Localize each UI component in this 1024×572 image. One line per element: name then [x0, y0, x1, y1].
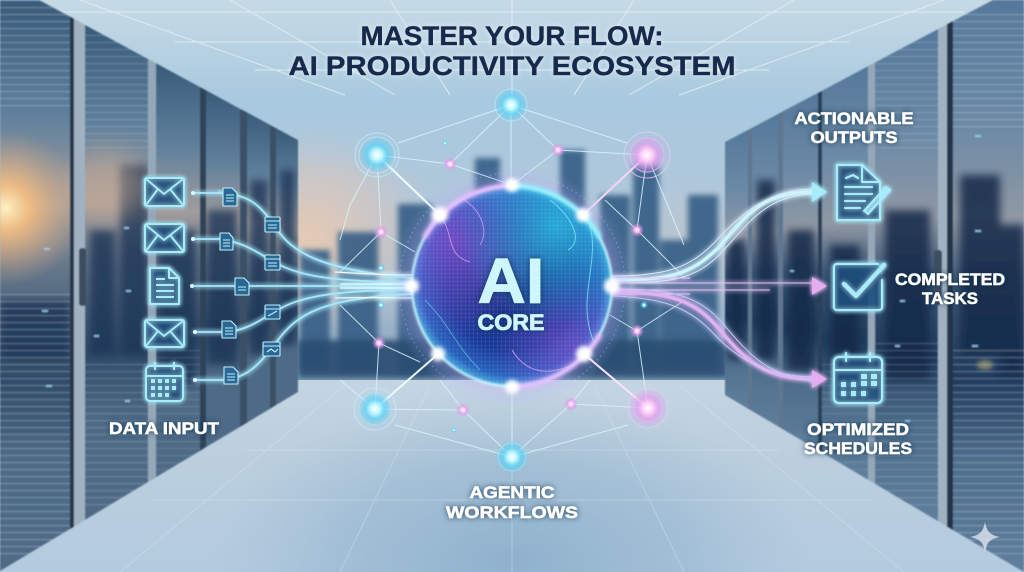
packet: doc 4 [222, 321, 236, 338]
agentic workflow network [340, 88, 684, 474]
icon: calendar [146, 362, 183, 401]
icon: email 1 [145, 178, 184, 206]
label: actionable outputs: ACTIONABLE [794, 110, 914, 128]
ceiling [60, 0, 964, 95]
small data packets on flow lines [220, 188, 280, 384]
label: agentic workflows [446, 483, 578, 522]
label: data input: DATA INPUT [109, 420, 219, 438]
packet: doc 3 [235, 278, 249, 295]
label: actionable outputs [794, 110, 914, 147]
output icons [834, 165, 890, 403]
arrow: to completed tasks [612, 278, 812, 294]
packet: calendar 2 [265, 255, 280, 270]
packet: doc 1 [223, 188, 237, 206]
server racks: right [725, 0, 1024, 572]
label: optimized schedules: SCHEDULES [804, 440, 912, 458]
label: optimized schedules [804, 421, 912, 458]
server racks: left [0, 0, 298, 572]
output flow arrows [612, 182, 827, 388]
packet: calendar 3 [265, 305, 280, 319]
network hub nodes [354, 88, 670, 474]
label: agentic workflows: WORKFLOWS [446, 503, 578, 522]
arrow: to actionable outputs [612, 189, 812, 283]
label: actionable outputs: OUTPUTS [810, 129, 898, 147]
icon: schedule calendar [834, 353, 882, 403]
AI core globe [397, 170, 627, 400]
labels [109, 110, 1005, 522]
data input sources [145, 178, 184, 401]
title: MASTER YOUR FLOW: [360, 21, 664, 51]
arrow: to optimized schedules [612, 289, 812, 381]
icon: corner sparkle [970, 522, 1000, 552]
blurred city skyline [300, 150, 718, 374]
packet: calendar 4 [263, 342, 280, 356]
packet: calendar 1 [265, 217, 280, 232]
label: completed tasks: TASKS [922, 290, 978, 308]
globe label: AI [478, 245, 544, 317]
label: agentic workflows: AGENTIC [470, 483, 554, 502]
label: completed tasks: COMPLETED [895, 271, 1005, 289]
icon: document with pencil [837, 165, 890, 220]
icon: email 3 [145, 320, 184, 347]
title: AI PRODUCTIVITY ECOSYSTEM [288, 51, 736, 81]
icon: email 2 [145, 224, 184, 252]
packet: doc 2 [220, 233, 233, 250]
input flow lines [193, 193, 412, 380]
small network dots [372, 140, 648, 433]
label: completed tasks [895, 271, 1005, 308]
icon: completed checkbox [834, 264, 884, 310]
globe flares [405, 178, 620, 394]
floor [0, 380, 1024, 572]
globe label: CORE [478, 310, 544, 335]
icon: document [150, 268, 179, 304]
label: optimized schedules: OPTIMIZED [807, 421, 909, 439]
title [288, 21, 736, 81]
packet: doc 5 [224, 367, 238, 384]
